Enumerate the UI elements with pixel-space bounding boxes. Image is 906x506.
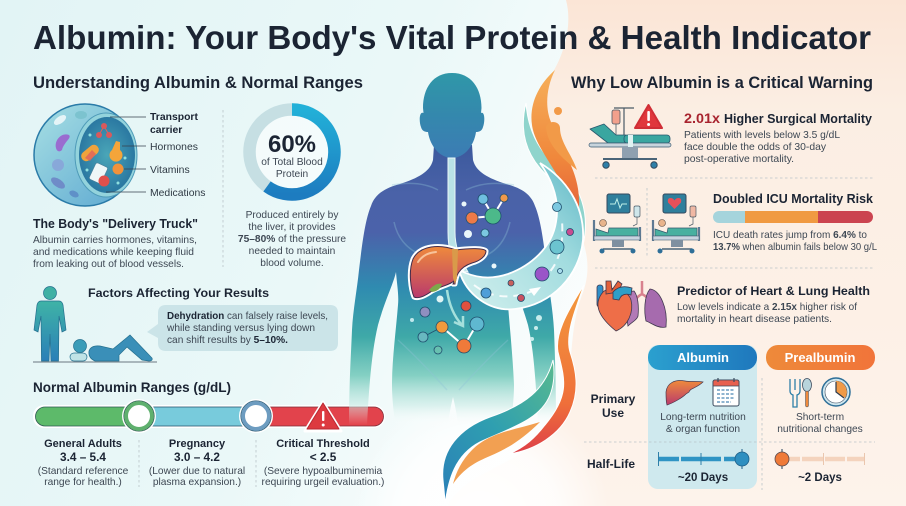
bloodstream vessel [448,158,583,309]
text: prealbumin use: Short-term [796,412,844,423]
stat: surgical mortality: post-operative mortality. [684,154,794,165]
stat: surgical mortality [684,111,872,165]
ribbon: upper teal [523,103,585,245]
header: albumin: Albumin [677,350,729,365]
icon: liver [410,247,486,298]
icon: warning triangle [305,402,341,431]
row label: primary use [591,392,636,420]
range: general adults: range for health.) [44,477,122,488]
range: pregnancy: Pregnancy [169,438,226,450]
text: albumin use: & organ function [666,424,740,435]
range: general adults [38,438,129,488]
range: critical threshold [262,438,384,488]
heading: delivery truck: The Body's "Delivery Truck" [33,216,198,231]
stat: heart and lung: Low levels indicate a 2.15x higher risk of [677,302,857,313]
range: pregnancy: plasma expansion.) [153,477,241,488]
stat: surgical mortality: 2.01x [684,111,721,126]
stat: ICU mortality: 13.7% when albumin fails below 30 g/L [713,242,877,253]
stat: heart and lung [677,284,870,325]
title: Albumin: Your Body's Vital Protein & Health Indicator [33,19,871,56]
labels: cell contents: Vitamins [150,165,190,176]
background: right peach side [448,0,906,506]
text: albumin use [660,412,746,435]
chart: 60 percent donut: of Total Blood [261,157,323,168]
head [420,73,484,158]
text: prealbumin use: nutritional changes [777,424,863,435]
icon: warning triangle [635,105,662,128]
range: general adults: 3.4 – 5.4 [60,450,106,464]
labels: cell contents: Medications [150,188,205,199]
header: albumin [648,345,757,370]
text block: delivery truck: and medications while keeping fluid [33,247,194,258]
ribbon: lower light orange [453,422,540,484]
chart: range bar [33,399,385,433]
range: critical threshold: requiring urgeil evaluation.) [262,477,384,488]
stat: heart and lung: mortality in heart disease patients. [677,314,832,325]
figure: human body [349,73,556,432]
stat: heart and lung: Predictor of Heart & Lung Health [677,284,870,298]
chart: 60 percent donut: Protein [276,169,308,180]
labels: cell contents: Transport [150,112,198,123]
timeline: albumin 20 days [658,449,749,484]
chart: 60 percent donut: 60% [268,131,316,158]
icon: small liver [666,380,703,405]
ribbon: upper orange [531,70,579,215]
icon: heart and lungs [597,281,666,331]
icon: orange droplets [546,107,577,170]
leader lines [106,117,146,192]
timeline: albumin 20 days: ~20 Days [678,472,728,484]
row label: primary use: Primary [591,392,636,406]
lungs [633,281,651,304]
body silhouette [349,145,556,432]
range: critical threshold: < 2.5 [310,450,337,464]
labels: cell contents [150,112,205,199]
callout: dehydration [147,305,338,351]
icon: clock [822,378,850,406]
text block: liver production: the liver, it provides [248,222,336,233]
range: pregnancy: 3.0 – 4.2 [174,450,220,464]
text block: liver production: needed to maintain [249,246,335,257]
callout: dehydration: can shift results by 5–10%. [167,335,288,346]
range: pregnancy [149,438,245,488]
heading: normal ranges: Normal Albumin Ranges (g/dL) [33,379,231,395]
heading: factors: Factors Affecting Your Results [88,286,269,300]
text: prealbumin use [777,412,863,435]
stat: surgical mortality: Patients with levels below 3.5 g/dL [684,130,840,141]
stat: surgical mortality: face double the odds of 30-day [684,142,827,153]
callout: dehydration: Dehydration can falsely raise levels, [167,311,328,322]
stat: ICU mortality: ICU death rates jump from 6.4% to [713,230,867,241]
icon: calendar [713,378,739,406]
row label: half-life: Half-Life [587,457,635,471]
heading: why low albumin: Why Low Albumin is a Critical Warning [571,74,873,92]
range: critical threshold: Critical Threshold [276,438,370,450]
header: prealbumin [766,345,875,370]
chest shading [392,183,514,390]
labels: cell contents: carrier [150,125,182,136]
text block: delivery truck [33,235,197,270]
row label: primary use: Use [602,406,624,420]
range: critical threshold: (Severe hypoalbuminemia [264,466,383,477]
text block: delivery truck: from leaking out of blood vessels. [33,259,184,270]
range: general adults: (Standard reference [38,466,129,477]
molecules: abdomen [410,296,542,354]
ribbon: lower teal blue [443,360,554,505]
text block: liver production: blood volume. [260,258,324,269]
labels: cell contents: Hormones [150,142,198,153]
timeline: prealbumin 2 days [775,449,865,484]
icon: standing and lying person [33,286,157,362]
ribbon: lower orange [509,285,584,454]
bar: ICU risk [713,211,873,223]
icon: albumin cell [34,104,146,206]
header: prealbumin: Prealbumin [785,350,855,365]
panel: albumin column [648,345,757,489]
icon: ICU bed 2 [653,194,699,254]
icon: ICU bed 1 [594,194,640,254]
molecules: chest [462,194,508,268]
chart: 60 percent donut [250,110,334,194]
arrow: liver to body [447,290,463,326]
text block: liver production [238,210,346,269]
icon: fork and spoon [790,378,812,407]
text: albumin use: Long-term nutrition [660,412,746,423]
timeline: prealbumin 2 days: ~2 Days [798,472,842,484]
stat: ICU mortality [713,192,877,253]
heading: understanding albumin: Understanding Albumin & Normal Ranges [33,73,363,92]
stat: surgical mortality: Higher Surgical Mortality [724,112,872,126]
callout: dehydration: while standing versus lying down [166,323,315,334]
text block: liver production: 75–80% of the pressure [238,234,346,245]
stat: ICU mortality: Doubled ICU Mortality Risk [713,192,874,206]
range: general adults: General Adults [44,438,122,450]
molecules: bloodstream [481,202,574,302]
heart [597,285,603,307]
icon: hospital bed and warning [589,105,671,168]
text block: delivery truck: Albumin carries hormones, vitamins, [33,235,197,246]
range: pregnancy: (Lower due to natural [149,466,245,477]
text block: liver production: Produced entirely by [246,210,339,221]
